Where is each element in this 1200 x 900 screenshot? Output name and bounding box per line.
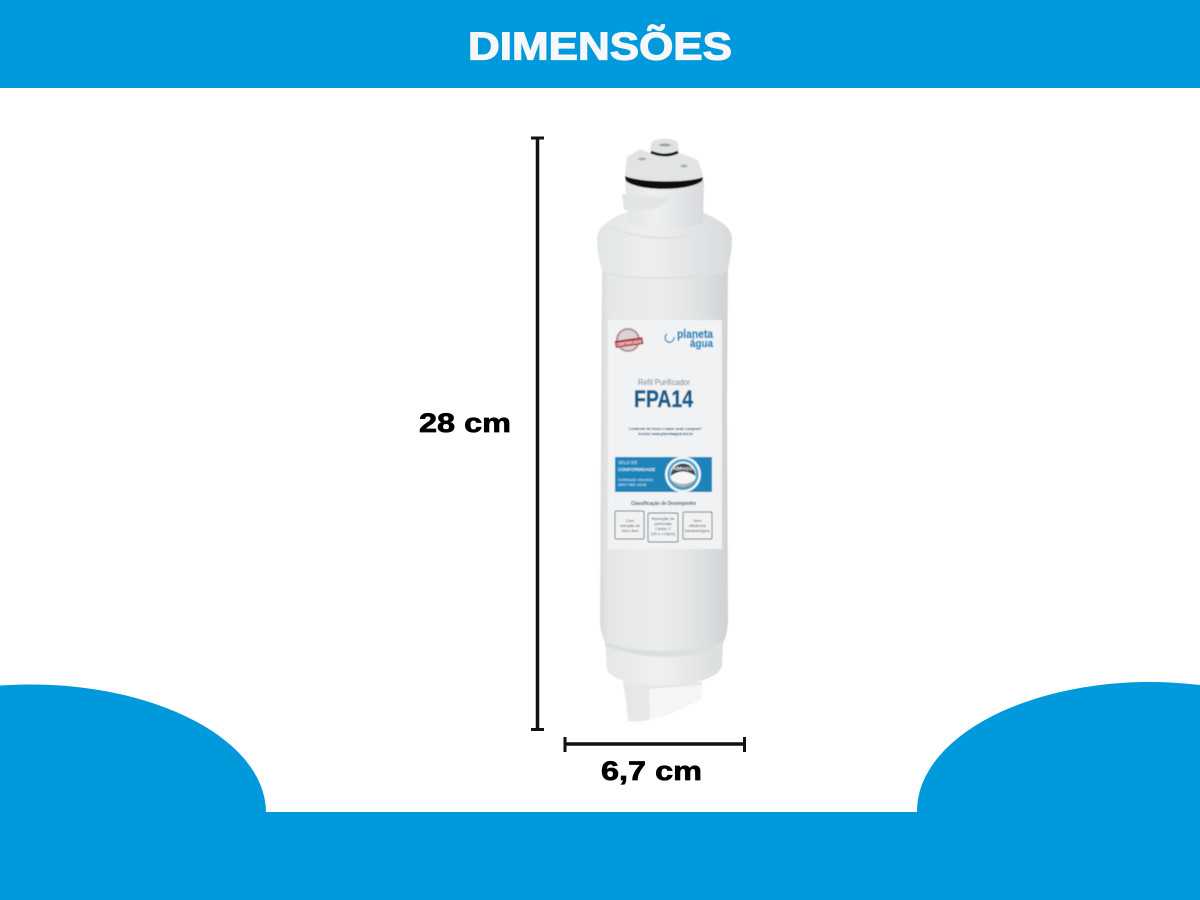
product label: Sem <box>693 518 702 523</box>
filter shoulder <box>597 212 732 278</box>
blue conformity band <box>615 457 712 492</box>
height label: 28 cm <box>419 408 511 438</box>
product label <box>608 320 722 549</box>
product label: bacteriológica <box>685 528 711 533</box>
height dimension line <box>531 138 544 730</box>
product label: Certificação Voluntária <box>618 478 653 482</box>
product label: Retenção de <box>652 516 675 521</box>
product label: redução de <box>620 523 641 528</box>
brand logo <box>665 327 714 350</box>
filter neck and collar <box>622 139 704 228</box>
product label: FPA14 <box>634 386 693 413</box>
filter body <box>600 262 728 651</box>
brand logo: água <box>690 338 714 350</box>
product: water filter cartridge <box>597 139 732 722</box>
footer band with curved corners <box>0 682 1200 900</box>
width label: 6,7 cm <box>601 756 702 786</box>
label note: Acesse www.planetaagua.ind.br <box>638 432 693 436</box>
certified seal: CERTIFICADO <box>616 339 642 347</box>
header band <box>0 0 1200 88</box>
product label: Com <box>626 518 635 523</box>
product label: Classe C <box>655 526 671 531</box>
filter outlet base <box>605 636 723 722</box>
performance heading: Classificação de Desempenho <box>631 501 696 507</box>
title: DIMENSÕES <box>468 24 732 68</box>
label note <box>629 427 703 436</box>
product label: CONFORMIDADE <box>618 467 655 472</box>
seal <box>665 456 701 492</box>
width dimension line <box>565 737 745 752</box>
seal: ABRAÇO <box>673 466 693 471</box>
product label: (≥5 a <15μm) <box>651 531 676 536</box>
performance boxes <box>615 511 712 542</box>
product label: cloro livre <box>621 528 639 533</box>
product label: partículas <box>654 521 672 526</box>
product name: Refil Purificador <box>638 377 690 387</box>
label note: Lembrete de troca e saber onde comprar? <box>629 427 703 431</box>
certified seal <box>615 329 643 351</box>
product label: eficiência <box>689 523 707 528</box>
brand logo: planeta <box>677 327 713 341</box>
product label: SELO DE <box>618 460 638 465</box>
product label: ABNT NBR 16098 <box>618 483 646 487</box>
